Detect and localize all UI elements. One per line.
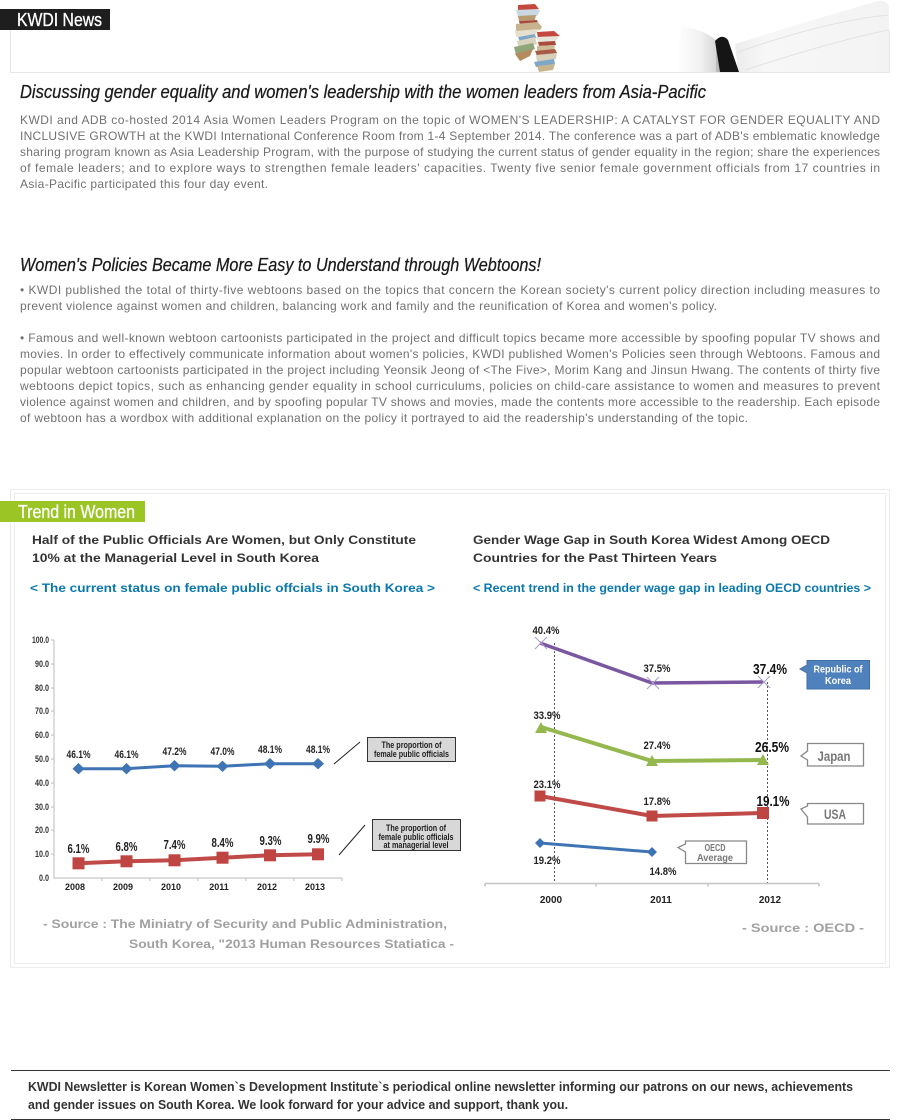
series: OECD average: 19.2% [534, 855, 561, 867]
y axis labels: 40.0 [35, 778, 49, 788]
left source note [43, 917, 454, 951]
series: female public officials: 46.1% [114, 749, 139, 761]
body text: movies. In order to effectively communicate information about women's policies, KWDI published Women's Policies seen through Webtoons. Famous and [20, 347, 880, 361]
callout: OECD average: Average [697, 853, 733, 864]
series: female public officials: 47.2% [162, 746, 187, 758]
y axis labels [32, 635, 49, 883]
series: Japan [534, 710, 789, 766]
callout: Republic of Korea: Korea [825, 676, 851, 687]
section tag: KWDI News: KWDI News [17, 10, 102, 30]
y axis labels: 30.0 [35, 802, 49, 812]
x axis [485, 884, 819, 886]
y axis labels: 10.0 [35, 849, 49, 859]
panel: header banner [0, 1, 890, 73]
series: managerial level [68, 831, 330, 869]
heading: Discussing gender equality and women's leadership with the women leaders from Asia-Pacific [20, 82, 706, 102]
series: OECD average: 14.8% [650, 866, 677, 878]
series: Republic of Korea: 37.5% [644, 663, 671, 675]
x axis labels: 2011 [209, 882, 229, 892]
icon: notebook and pen [676, 1, 889, 72]
left subheading: < The current status on female public offcials in South Korea > [30, 581, 435, 595]
y axis labels: 20.0 [35, 825, 49, 835]
body text: violence against women and children, and by spoofing popular TV shows and movies, made the contents more accessible to the readership. Each episode [20, 395, 880, 409]
body text: prevent violence against women and children, balancing work and family and the reunification of Korea and women's policy. [20, 299, 717, 313]
right subheading: < Recent trend in the gender wage gap in leading OECD countries > [473, 581, 871, 595]
guide lines [554, 643, 768, 884]
series: USA: 17.8% [644, 796, 671, 808]
series: female public officials: 47.0% [210, 746, 235, 758]
y axis labels: 50.0 [35, 754, 49, 764]
callout: OECD average: OECD [704, 843, 726, 854]
body text [20, 113, 880, 191]
series: managerial level: 7.4% [164, 837, 186, 852]
left heading: 10% at the Managerial Level in South Korea [32, 551, 319, 565]
series: USA [534, 779, 790, 822]
series: Republic of Korea: 37.4% [753, 661, 787, 678]
y axis labels: 90.0 [35, 659, 49, 669]
callout: female public officials: The proportion of [382, 740, 442, 750]
series: Japan: 33.9% [534, 710, 561, 722]
right heading [473, 533, 830, 565]
x axis labels [540, 895, 782, 906]
series: managerial level: 8.4% [212, 835, 234, 850]
icon: stacks of books [514, 4, 560, 72]
callout: managerial level: at managerial level [384, 840, 448, 850]
footer note: KWDI Newsletter is Korean Women`s Development Institute`s periodical online newsletter informing our patrons on our news, achievements [28, 1080, 853, 1094]
left source note: South Korea, "2013 Human Resources Statiatica - [129, 937, 454, 951]
heading: Women's Policies Became More Easy to Understand through Webtoons! [20, 255, 541, 275]
callout: OECD average [678, 841, 746, 864]
series: Japan: 27.4% [644, 740, 671, 752]
callout: managerial level [339, 820, 460, 855]
x axis labels: 2012 [257, 882, 277, 892]
series: managerial level: 9.3% [260, 833, 282, 848]
series: Republic of Korea [532, 625, 787, 689]
body text: of webtoon has a wordbox with additional explanation on the policy it portrayed to aid the readership's understanding of the topic. [20, 411, 748, 425]
axes [51, 640, 342, 881]
x axis labels: 2013 [305, 882, 325, 892]
y axis labels: 0.0 [39, 873, 49, 883]
panel: trend in women [0, 490, 890, 968]
series: Japan: 26.5% [755, 739, 789, 756]
left heading [32, 533, 416, 565]
callout: female public officials: female public officials [374, 749, 449, 759]
body text: • KWDI published the total of thirty-five webtoons based on the topics that concern the Korean society's current policy direction including measures to [20, 283, 880, 297]
series: female public officials: 48.1% [258, 744, 282, 756]
series: managerial level: 6.1% [68, 841, 90, 856]
right heading: Countries for the Past Thirteen Years [473, 551, 717, 565]
series: Republic of Korea: 40.4% [532, 625, 560, 637]
article: women's leadership [20, 82, 880, 191]
line chart: gender wage gap [485, 625, 870, 906]
x axis labels: 2010 [161, 882, 181, 892]
x axis labels: 2012 [759, 895, 782, 906]
y axis labels: 100.0 [32, 635, 49, 645]
series: managerial level: 9.9% [308, 831, 330, 846]
callout: USA: USA [824, 806, 846, 822]
body text: sharing program known as Asia Leadership Program, with the purpose of studying the current status of gender equality in the region; share the experiences [20, 145, 880, 159]
footer note [11, 1070, 890, 1120]
body text: • Famous and well-known webtoon cartoonists participated in the project and difficult topics became more accessible by spoofing popular TV shows and [20, 331, 880, 345]
body text: popular webtoon cartoonists participated in the project including Yeonsik Jeong of <The Five>, Morim Kang and Jinsun Hwang. The contents of thirty five [20, 363, 880, 377]
series: managerial level: 6.8% [116, 839, 138, 854]
y axis labels: 60.0 [35, 730, 49, 740]
left source note: - Source : The Miniatry of Security and Public Administration, [43, 917, 447, 931]
series: female public officials: 48.1% [306, 744, 330, 756]
footer note: and gender issues on South Korea. We look forward for your advice and support, thank you. [28, 1098, 568, 1112]
line chart: female public officials [32, 635, 460, 892]
callout: managerial level: female public officials [378, 832, 454, 842]
callout: USA [801, 804, 864, 824]
body text: webtoons depict topics, such as enhancing gender equality in school curriculums, policies on child-care assistance to women and measures to prevent [19, 379, 881, 393]
body text: KWDI and ADB co-hosted 2014 Asia Women Leaders Program on the topic of WOMEN'S LEADERSHIP: A CATALYST FOR GENDER EQUALITY AND [20, 113, 880, 127]
callout: managerial level: The proportion of [386, 823, 447, 833]
series: female public officials [66, 744, 330, 774]
series: USA: 19.1% [756, 793, 790, 810]
x axis labels [65, 882, 325, 892]
x axis labels: 2009 [113, 882, 133, 892]
series: female public officials: 46.1% [66, 749, 91, 761]
callout: Japan: Japan [818, 748, 850, 764]
article: webtoons [19, 255, 881, 425]
x axis labels: 2011 [650, 895, 672, 906]
series: USA: 23.1% [534, 779, 561, 791]
callout: Japan [801, 744, 864, 766]
body text: INCLUSIVE GROWTH at the KWDI International Conference Room from 1-4 September 2014. The conference was a part of ADB's emblematic knowledge [20, 129, 880, 143]
callout: female public officials [334, 738, 456, 764]
body text [19, 283, 881, 425]
callout: Republic of Korea [800, 660, 870, 689]
callout: Republic of Korea: Republic of [814, 664, 863, 676]
body text: Asia-Pacific participated this four day event. [20, 177, 268, 191]
section tag: Trend in Women: Trend in Women [18, 502, 135, 522]
x axis labels: 2008 [65, 882, 85, 892]
y axis labels: 80.0 [35, 683, 49, 693]
body text: of female leaders; and to explore ways to strengthen female leaders' capacities. Twenty five senior female government officials from 17 countries in [20, 161, 880, 175]
left heading: Half of the Public Officials Are Women, but Only Constitute [32, 533, 416, 547]
y axis labels: 70.0 [35, 706, 49, 716]
series: OECD average [534, 838, 677, 878]
x axis labels: 2000 [540, 895, 563, 906]
right heading: Gender Wage Gap in South Korea Widest Among OECD [473, 533, 830, 547]
right source note: - Source : OECD - [742, 921, 864, 935]
